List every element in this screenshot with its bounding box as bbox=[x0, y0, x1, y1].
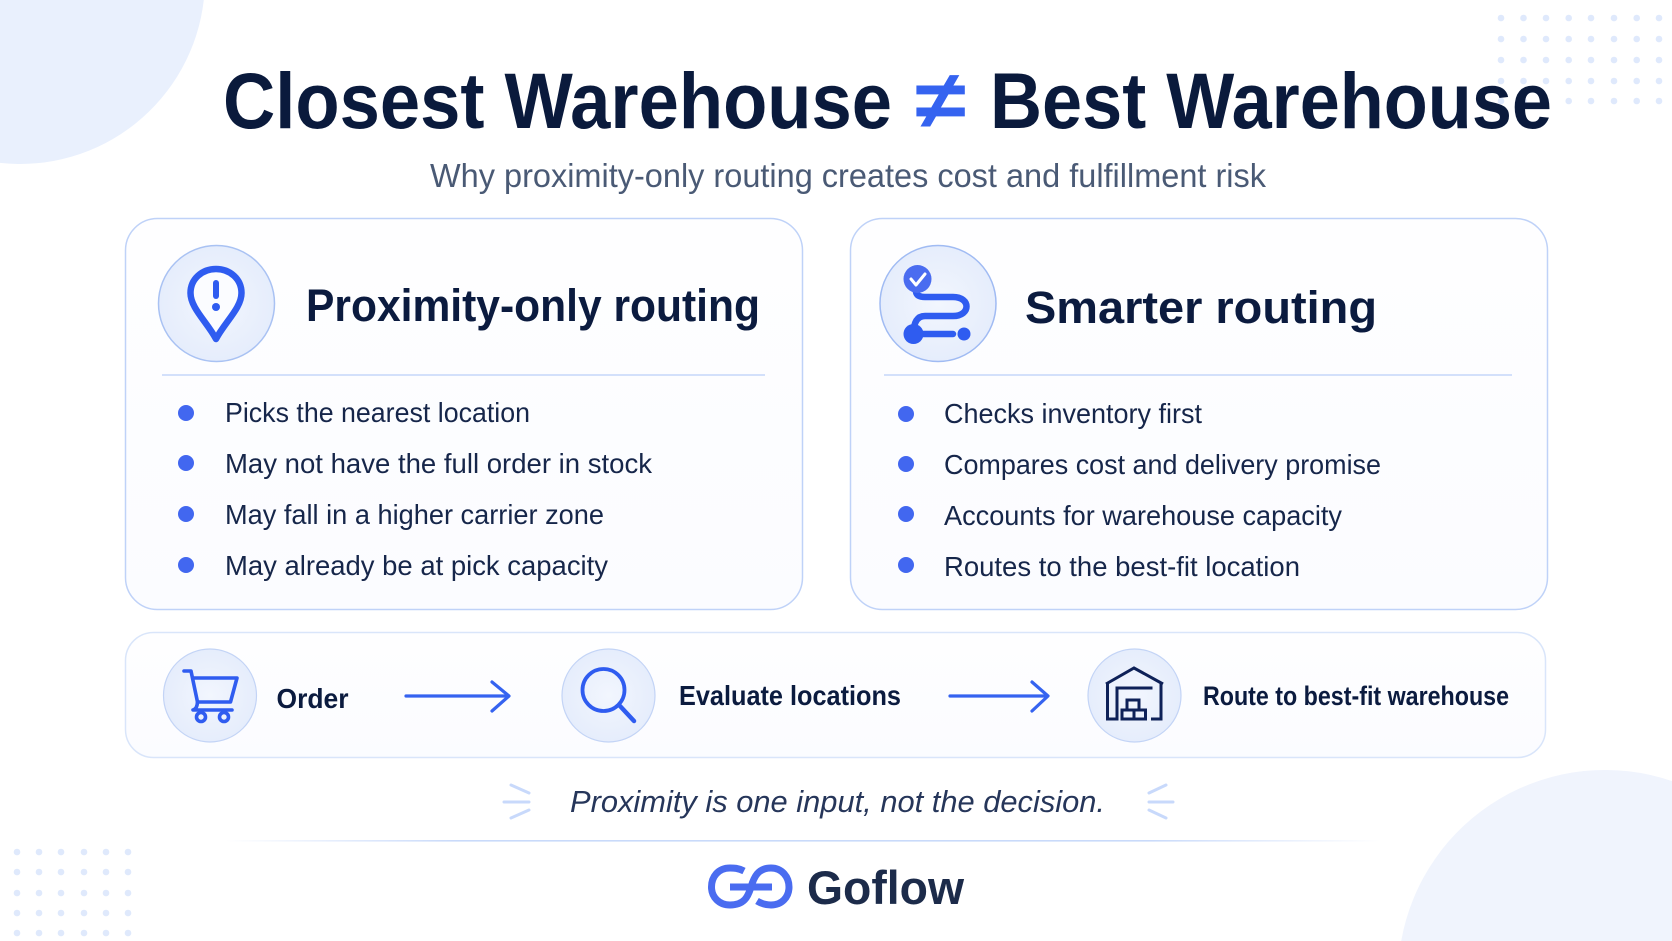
title bbox=[223, 55, 1552, 146]
heading: smarter routing: Smarter routing bbox=[1025, 282, 1377, 333]
list: smarter routing benefits: Accounts for warehouse capacity bbox=[944, 500, 1342, 531]
logo: Goflow bbox=[712, 861, 964, 914]
icon: shopping cart bbox=[164, 649, 256, 742]
decorative corner circle: top left bbox=[0, 0, 204, 164]
title: Closest Warehouse bbox=[223, 56, 892, 145]
list: proximity-only drawbacks bbox=[178, 397, 653, 581]
decoration: right tagline accents bbox=[1149, 785, 1173, 818]
list: proximity-only drawbacks: May not have the full order in stock bbox=[225, 448, 653, 479]
arrow: order to evaluate bbox=[406, 682, 509, 711]
list: proximity-only drawbacks: Picks the nearest location bbox=[225, 397, 530, 428]
icon: location pin with alert bbox=[158, 246, 274, 362]
heading: proximity-only routing: Proximity-only routing bbox=[306, 280, 760, 331]
list: proximity-only drawbacks: May already be at pick capacity bbox=[225, 550, 608, 581]
icon: warehouse bbox=[1088, 649, 1181, 742]
step label: evaluate locations: Evaluate locations bbox=[679, 680, 901, 711]
list: smarter routing benefits: Compares cost and delivery promise bbox=[944, 449, 1381, 480]
icon: Goflow mark bbox=[712, 868, 789, 905]
panel: proximity-only routing bbox=[126, 218, 802, 610]
arrow: evaluate to route bbox=[950, 682, 1048, 711]
step label: route to best-fit warehouse: Route to best-fit warehouse bbox=[1203, 681, 1509, 711]
title: ≠ bbox=[915, 55, 966, 146]
panel: smarter routing bbox=[850, 218, 1548, 610]
wordmark: Goflow bbox=[807, 861, 964, 914]
list: smarter routing benefits: Routes to the best-fit location bbox=[944, 551, 1300, 582]
decorative dot grid: bottom left bbox=[14, 849, 131, 936]
list: proximity-only drawbacks: May fall in a higher carrier zone bbox=[225, 499, 604, 530]
list: smarter routing benefits bbox=[898, 398, 1381, 582]
title: Best Warehouse bbox=[990, 56, 1552, 145]
tagline: Proximity is one input, not the decision. bbox=[570, 784, 1105, 819]
subtitle: Why proximity-only routing creates cost and fulfillment risk bbox=[430, 157, 1266, 194]
panel: process flow strip bbox=[126, 632, 1546, 758]
list: smarter routing benefits: Checks inventory first bbox=[944, 398, 1202, 429]
decorative corner circle: bottom right bbox=[1401, 770, 1672, 941]
decorative dot grid: top right bbox=[1498, 15, 1662, 104]
icon: route with checkmark bbox=[880, 246, 996, 362]
decoration: left tagline accents bbox=[504, 785, 529, 818]
icon: magnifier bbox=[562, 649, 655, 742]
step label: order: Order bbox=[276, 683, 349, 714]
